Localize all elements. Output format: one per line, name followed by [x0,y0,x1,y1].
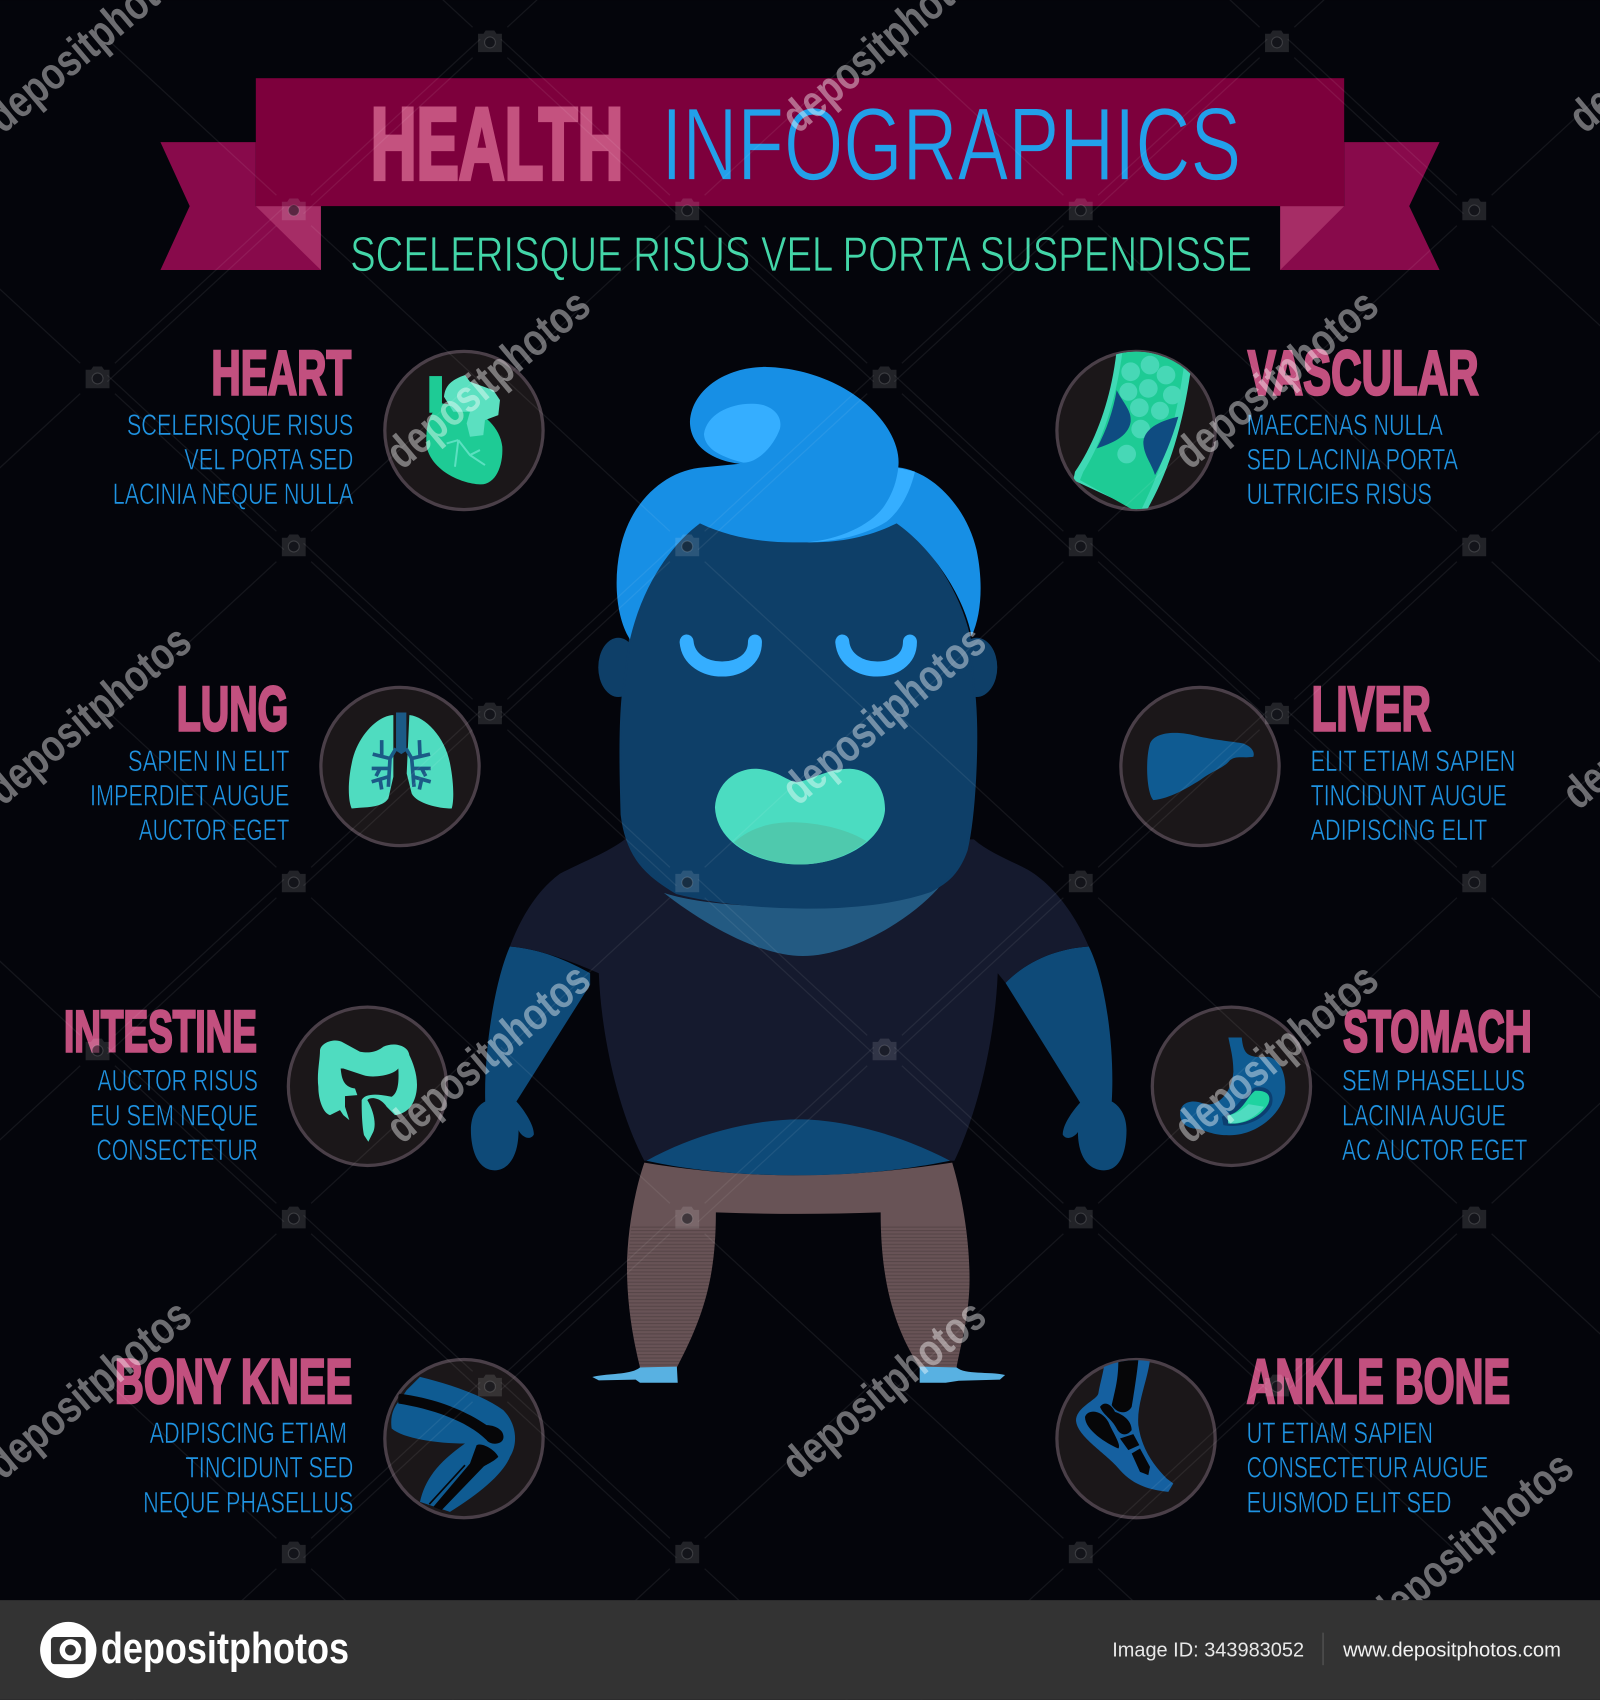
heading: lung: LUNG [177,675,288,745]
text: stomach description: SEM PHASELLUS [1342,1066,1525,1098]
icon: ankle x-ray [1057,1359,1215,1518]
watermark text: depositphotos [376,953,600,1153]
head [598,367,997,908]
text: ankle bone description [1247,1418,1488,1519]
text: bony knee description: TINCIDUNT SED [185,1453,353,1485]
text: liver description: ADIPISCING ELIT [1311,815,1487,847]
footer logo: depositphotos [101,1625,349,1673]
heading: bony knee: BONY KNEE [115,1347,352,1417]
text: bony knee description: ADIPISCING ETIAM [150,1418,347,1450]
banner [160,78,1440,270]
text: ankle bone description: EUISMOD ELIT SED [1247,1487,1451,1519]
text: heart description: SCELERISQUE RISUS [127,410,353,442]
panel: liver [1121,675,1515,847]
icon: knee x-ray [385,1359,543,1518]
panel: stomach [1152,1000,1532,1167]
watermark text: depositphotos [1164,953,1388,1153]
panel: heart [113,339,543,511]
icon: stomach [1152,1007,1311,1165]
title: HEALTH [371,87,623,201]
icon: blood vessel [1057,350,1215,513]
text: vascular description [1247,410,1458,511]
panel: bony knee [115,1347,543,1519]
text: lung description: AUCTOR EGET [139,815,290,847]
character figure [471,367,1127,1383]
watermark text: depositphotos [1164,279,1388,478]
text: vascular description: ULTRICIES RISUS [1247,479,1432,511]
text: liver description: ELIT ETIAM SAPIEN [1311,746,1515,778]
icon: liver [1121,687,1279,846]
text: vascular description: MAECENAS NULLA [1247,410,1443,442]
text: heart description [113,410,354,511]
heading: vascular: VASCULAR [1248,339,1479,409]
watermark text: depositphotos [771,615,995,814]
panel: vascular [1057,339,1479,513]
text: liver description: TINCIDUNT AUGUE [1311,781,1507,813]
heading: liver: LIVER [1312,675,1431,745]
text: lung description: IMPERDIET AUGUE [90,781,289,813]
text: bony knee description: NEQUE PHASELLUS [143,1487,353,1519]
panel: intestine [64,1000,447,1167]
text: lung description: SAPIEN IN ELIT [128,746,290,778]
icon: lungs [321,687,479,846]
heading: intestine: INTESTINE [64,1000,257,1065]
watermark text: depositphotos [376,279,600,478]
title [371,87,1241,203]
text: lung description [90,746,290,847]
watermark text: depositphotos [771,1289,995,1489]
heading: heart: HEART [211,339,351,409]
text: stomach description: LACINIA AUGUE [1342,1100,1506,1132]
text: bony knee description [143,1418,353,1519]
footer image id: Image ID: 343983052 [1112,1639,1304,1662]
text: intestine description [90,1066,258,1167]
text: vascular description: SED LACINIA PORTA [1247,445,1458,477]
text: stomach description [1342,1066,1527,1167]
panel: lung [90,675,479,847]
text: intestine description: CONSECTETUR [96,1135,258,1167]
text: heart description: VEL PORTA SED [184,445,353,477]
text: intestine description: AUCTOR RISUS [98,1066,258,1098]
icon: heart [385,351,543,510]
text: ankle bone description: UT ETIAM SAPIEN [1247,1418,1433,1450]
text: heart description: LACINIA NEQUE NULLA [113,479,354,511]
footer url: www.depositphotos.com [1342,1639,1561,1662]
text: intestine description: EU SEM NEQUE [90,1100,258,1132]
text: ankle bone description: CONSECTETUR AUGUE [1247,1453,1488,1485]
text: liver description [1311,746,1515,847]
text: stomach description: AC AUCTOR EGET [1342,1135,1527,1167]
body [471,839,1127,1383]
title: INFOGRAPHICS [661,87,1241,203]
footer logo [40,1622,349,1678]
footer bar [0,1600,1600,1700]
panel: ankle bone [1057,1347,1510,1519]
icon: intestine [288,1007,447,1165]
subtitle: SCELERISQUE RISUS VEL PORTA SUSPENDISSE [350,228,1252,282]
